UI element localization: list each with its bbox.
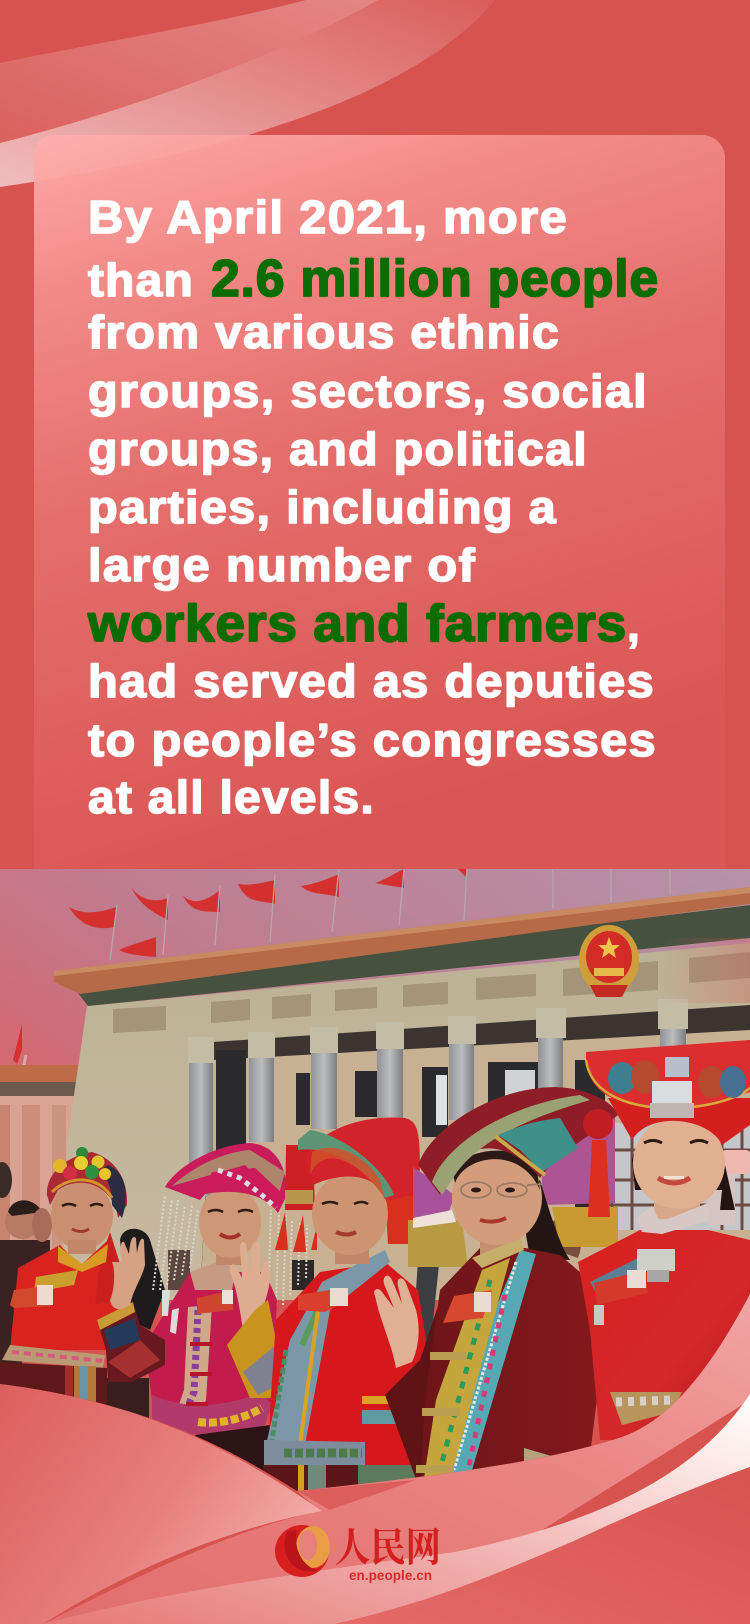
skirt xyxy=(0,1362,107,1405)
face xyxy=(633,1117,725,1209)
jacket xyxy=(420,1248,603,1490)
robe xyxy=(578,1230,750,1440)
highlight: 2.6 million people: 2.6 million people xyxy=(211,250,659,308)
photo: Great Hall of the People with deputies xyxy=(0,869,750,1500)
face features xyxy=(208,1210,253,1212)
collar xyxy=(190,1262,234,1290)
person 3 xyxy=(227,1117,426,1500)
roof xyxy=(54,887,750,994)
main statement text: had served as deputies xyxy=(88,655,655,707)
person 1 xyxy=(0,1147,127,1420)
person 2 raised hand xyxy=(230,1242,270,1330)
face xyxy=(312,1173,388,1255)
main statement text: By April 2021, more xyxy=(88,191,568,243)
skirt xyxy=(263,1465,358,1500)
hat xyxy=(418,1087,618,1195)
collar xyxy=(636,1203,709,1234)
national emblem xyxy=(579,925,639,997)
embroidered trim xyxy=(170,1305,212,1438)
background crowd xyxy=(0,1162,581,1428)
sky xyxy=(0,869,750,1065)
face xyxy=(51,1182,113,1250)
left wing of building xyxy=(0,1065,80,1256)
rear window grid xyxy=(602,1123,750,1230)
highlight: workers and farmers: workers and farmers xyxy=(87,595,627,653)
left sleeve xyxy=(227,1300,278,1398)
lower right corner xyxy=(335,1467,750,1624)
main statement text: than xyxy=(88,254,194,306)
main statement text: at all levels. xyxy=(88,771,375,823)
person 3 raised hand xyxy=(374,1276,419,1368)
main building wall xyxy=(60,943,750,1300)
green frieze xyxy=(74,905,750,1006)
frog buttons xyxy=(186,1342,212,1406)
flag poles xyxy=(22,869,670,1065)
hat with pompoms xyxy=(47,1152,127,1218)
lower left blob xyxy=(0,1384,322,1624)
hair top xyxy=(452,1151,540,1190)
jacket xyxy=(268,1262,426,1490)
gold beads xyxy=(552,1207,618,1247)
blue-green trim xyxy=(266,1250,390,1445)
main statement text: , xyxy=(627,599,641,651)
jacket xyxy=(145,1272,277,1437)
white ribbon xyxy=(43,1394,750,1624)
face features xyxy=(62,1204,103,1206)
badge xyxy=(594,1270,648,1305)
face xyxy=(452,1151,542,1245)
main statement text: parties, including a xyxy=(88,481,557,533)
silver pendants xyxy=(162,1290,179,1334)
face features xyxy=(644,1140,708,1143)
hat body xyxy=(608,1098,750,1145)
hat crest xyxy=(586,1040,750,1108)
hat side panel xyxy=(285,1145,315,1210)
badge xyxy=(443,1290,492,1323)
belt xyxy=(2,1345,105,1368)
face xyxy=(199,1186,261,1258)
logo: People's Daily Online xyxy=(275,1516,441,1583)
neck xyxy=(654,1195,700,1219)
person 4 xyxy=(385,1087,618,1490)
recessed portico xyxy=(200,1005,750,1300)
column capitals xyxy=(188,999,688,1063)
hem xyxy=(524,1448,565,1472)
hair xyxy=(632,1131,735,1210)
hat xyxy=(306,1117,420,1200)
hem xyxy=(264,1440,365,1468)
mouth xyxy=(480,1218,506,1222)
bead curtains xyxy=(153,1195,307,1307)
red knot tassel xyxy=(583,1109,613,1217)
neck xyxy=(68,1240,96,1254)
badge xyxy=(10,1287,50,1308)
main statement text: large number of xyxy=(88,539,476,591)
red scarf xyxy=(95,1232,122,1305)
neck xyxy=(335,1240,369,1264)
peacock motifs xyxy=(608,1062,636,1094)
person 1 raised hand xyxy=(110,1237,145,1309)
hem band xyxy=(152,1392,272,1434)
windows xyxy=(216,1050,605,1207)
embroidered belt xyxy=(610,1392,682,1425)
embroidered trim xyxy=(446,1250,536,1478)
panel: text card xyxy=(34,135,725,870)
skirt xyxy=(195,1425,270,1474)
left sleeve xyxy=(97,1302,165,1382)
lower band: pink sweep xyxy=(43,1294,750,1624)
person 5 xyxy=(578,1040,750,1440)
hat xyxy=(165,1143,287,1213)
logo url: en.people.cn xyxy=(349,1568,432,1583)
main statement text: groups, and political xyxy=(88,423,588,475)
dark fold under photo xyxy=(297,1480,415,1510)
collar xyxy=(58,1244,108,1272)
right wall fade xyxy=(676,938,750,1003)
tassels xyxy=(275,1195,418,1252)
relief panels xyxy=(113,952,750,1033)
columns xyxy=(189,1029,686,1197)
badge xyxy=(197,1292,233,1314)
flags xyxy=(13,869,467,1064)
main statement text xyxy=(87,191,659,823)
main statement text: to people’s congresses xyxy=(88,714,657,766)
gold frogs xyxy=(416,1352,466,1473)
glasses xyxy=(461,1182,542,1198)
neck xyxy=(216,1254,242,1265)
silver ornament xyxy=(665,1057,689,1077)
badge xyxy=(298,1288,348,1312)
rear raised arm xyxy=(708,1168,735,1225)
main statement text: from various ethnic xyxy=(88,306,560,358)
robe xyxy=(10,1240,122,1350)
person 2 xyxy=(97,1143,287,1490)
left sleeve dark xyxy=(385,1300,460,1490)
hair xyxy=(520,1180,570,1260)
decorative top ribbons xyxy=(0,0,495,187)
main statement text: groups, sectors, social xyxy=(88,365,648,417)
logo wordmark: 人民网 xyxy=(335,1516,441,1573)
face features xyxy=(322,1202,368,1204)
neck and collar xyxy=(480,1235,510,1255)
logo mark xyxy=(275,1525,330,1577)
purple cloth xyxy=(542,1110,615,1205)
